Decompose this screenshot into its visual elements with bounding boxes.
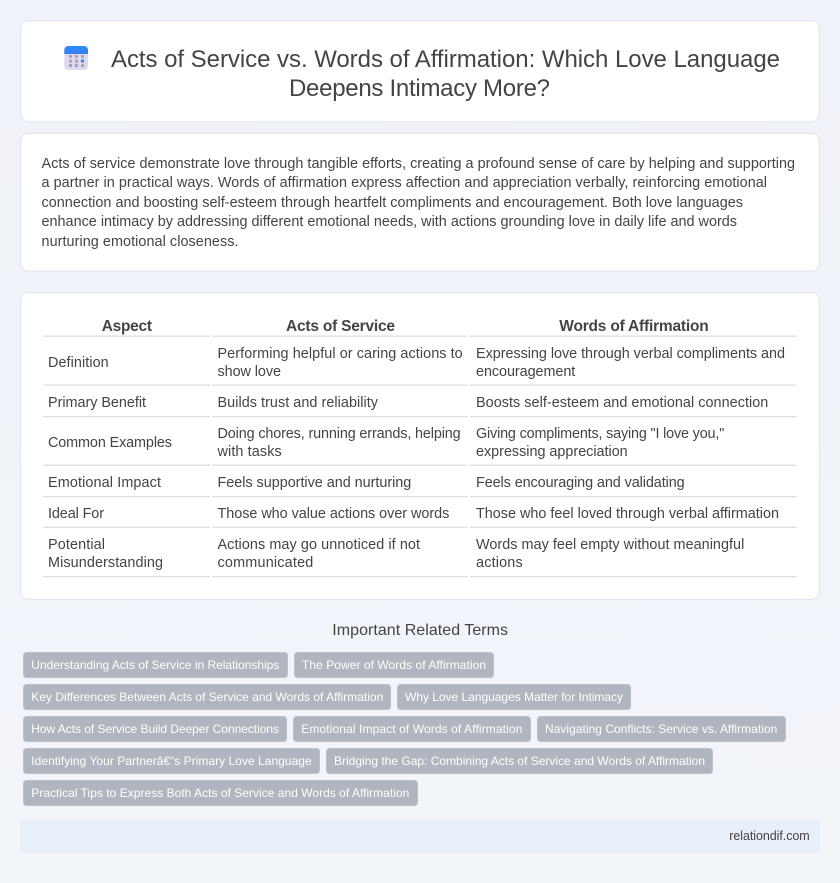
text block: summary	[42, 156, 795, 250]
row: potential misunderstanding: Words may feel empty without meaningful	[476, 537, 744, 553]
heading: important related terms: Important Related Terms	[332, 622, 508, 639]
chip	[24, 652, 288, 678]
chip	[538, 716, 786, 742]
row: common examples: Doing chores, running errands, helping	[218, 426, 461, 442]
chip	[398, 684, 630, 710]
row: emotional impact: Feels supportive and nurturing	[218, 475, 411, 491]
row: definition: encouragement	[476, 364, 575, 380]
row: emotional impact	[48, 475, 685, 491]
chip: Why Love Languages Matter for Intimacy	[405, 690, 623, 704]
row: common examples: Giving compliments, saying "I love you,"	[476, 426, 724, 442]
row: definition	[48, 346, 785, 380]
row: primary benefit: Boosts self-esteem and emotional connection	[476, 395, 768, 411]
row: common examples: with tasks	[216, 444, 282, 460]
table header row: Words of Affirmation	[559, 318, 709, 335]
row: potential misunderstanding: Potential	[48, 537, 105, 553]
chip: Bridging the Gap: Combining Acts of Service and Words of Affirmation	[334, 754, 705, 768]
table header row: Acts of Service	[286, 318, 395, 335]
chip: The Power of Words of Affirmation	[302, 658, 486, 672]
panel: comparison table	[21, 293, 819, 599]
row: emotional impact: Emotional Impact	[48, 475, 161, 491]
row: primary benefit: Builds trust and reliability	[218, 395, 379, 411]
chip: Practical Tips to Express Both Acts of Service and Words of Affirmation	[31, 786, 409, 800]
row: definition: Definition	[48, 355, 109, 371]
chip: Key Differences Between Acts of Service and Words of Affirmation	[31, 690, 383, 704]
panel: related term chips	[24, 652, 786, 806]
row: definition: Expressing love through verbal compliments and	[476, 346, 785, 362]
table header row	[102, 318, 709, 335]
chip: Understanding Acts of Service in Relationships	[31, 658, 279, 672]
table header row: Aspect	[102, 318, 152, 335]
row: potential misunderstanding: actions	[476, 555, 523, 571]
chip	[294, 652, 494, 678]
title: Deepens Intimacy More?	[289, 75, 550, 102]
row: potential misunderstanding: Actions may go unnoticed if not	[218, 537, 420, 553]
chip	[24, 684, 390, 710]
title	[111, 46, 780, 102]
panel: header	[21, 21, 819, 122]
chip: How Acts of Service Build Deeper Connections	[31, 722, 279, 736]
chip: Navigating Conflicts: Service vs. Affirmation	[545, 722, 777, 736]
icon: calendar	[64, 46, 88, 70]
text block: summary: a partner in practical ways. Words of affirmation express affection and appreciation verbally, reinforcing emotional	[42, 175, 767, 191]
row: ideal for: Those who value actions over words	[218, 506, 449, 522]
row: ideal for: Ideal For	[48, 506, 104, 522]
chip	[24, 780, 418, 806]
chip: Emotional Impact of Words of Affirmation	[301, 722, 522, 736]
row: common examples: Common Examples	[48, 435, 172, 451]
row: definition: show love	[218, 364, 281, 380]
footer: relationdif.com	[729, 829, 810, 843]
text block: summary: nurturing emotional closeness.	[42, 234, 238, 250]
chip	[24, 716, 286, 742]
text block: summary: enhance intimacy by addressing different emotional needs, with actions grounding love in daily life and words	[42, 214, 737, 230]
chip	[294, 716, 530, 742]
row: common examples: expressing appreciation	[476, 444, 628, 460]
chip: Identifying Your Partnerâ€“s Primary Love Language	[31, 754, 312, 768]
chip	[326, 748, 712, 774]
row: primary benefit	[48, 395, 768, 411]
row: potential misunderstanding: communicated	[218, 555, 313, 571]
row: definition: Performing helpful or caring actions to	[218, 346, 463, 362]
panel: summary paragraph	[21, 133, 819, 271]
text block: summary: connection and boosting self-esteem through heartfelt compliments and encouragement. Both love languages	[42, 195, 743, 211]
row: ideal for: Those who feel loved through verbal affirmation	[476, 506, 779, 522]
row: potential misunderstanding: Misunderstanding	[48, 555, 163, 571]
row: potential misunderstanding	[48, 537, 744, 571]
row: emotional impact: Feels encouraging and validating	[476, 475, 685, 491]
row: common examples	[48, 426, 724, 460]
text block: summary: Acts of service demonstrate love through tangible efforts, creating a profound sense of care by helping and supporting	[42, 156, 795, 172]
footer	[20, 819, 820, 853]
row: primary benefit: Primary Benefit	[48, 395, 146, 411]
title: Acts of Service vs. Words of Affirmation: Which Love Language	[111, 46, 780, 73]
row: ideal for	[48, 506, 779, 522]
chip	[24, 748, 320, 774]
